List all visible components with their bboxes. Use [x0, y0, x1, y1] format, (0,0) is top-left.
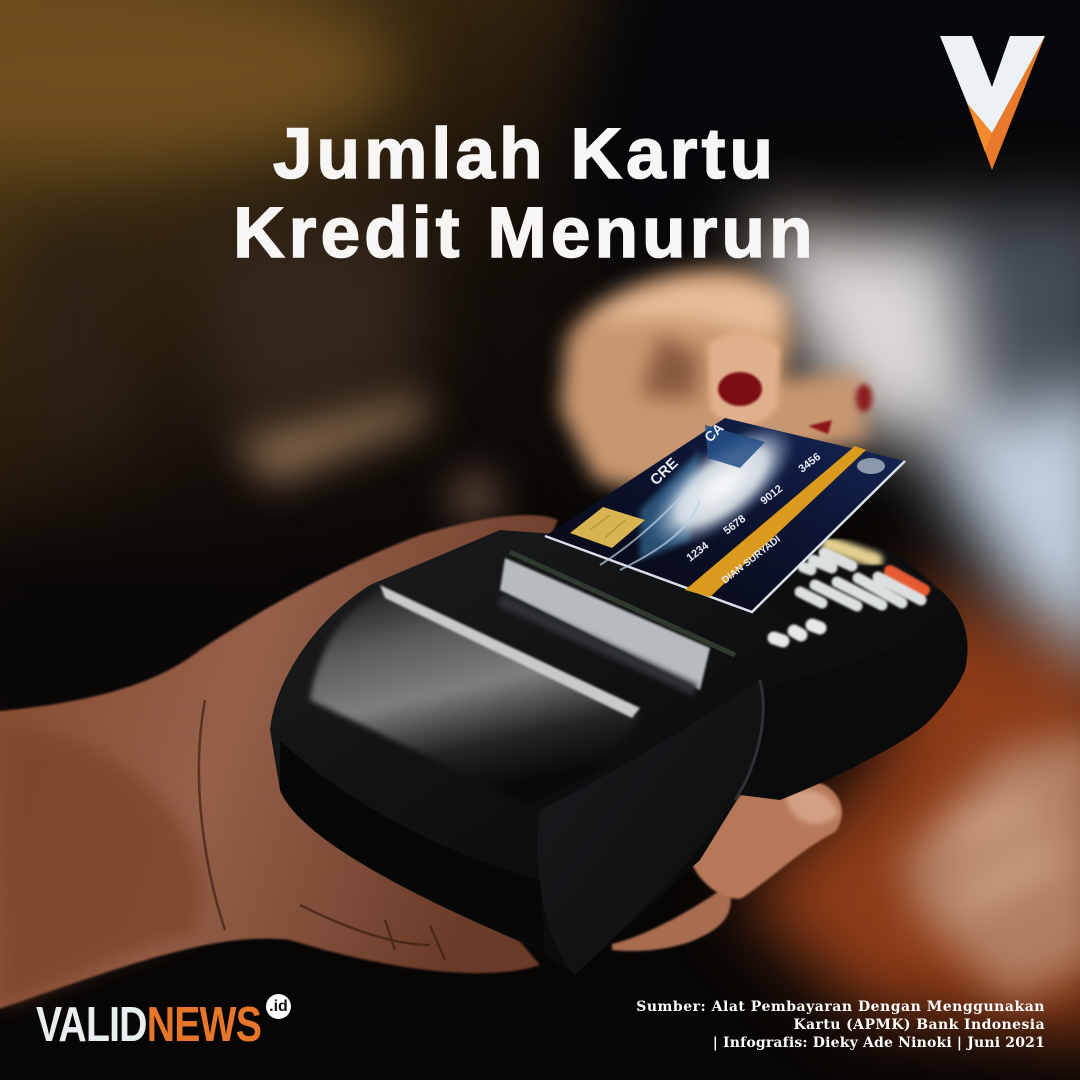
credit card: 9012 [758, 483, 785, 507]
credit card: CRE [647, 455, 682, 489]
hand holding the terminal [0, 515, 842, 1012]
source credit: Sumber: Alat Pembayaran Dengan Menggunakan [636, 999, 1045, 1015]
badge: .id: .id [269, 998, 288, 1015]
blurred hand at lower right [900, 730, 1080, 1000]
wordmark text: VALIDNEWS [36, 998, 261, 1052]
credit card: 1234 [684, 539, 712, 564]
logo: V mark top right [940, 36, 1045, 170]
source credit: | Infografis: Dieky Ade Ninoki | Juni 2021 [713, 1035, 1045, 1051]
source credit [636, 999, 1045, 1051]
card terminal body [270, 530, 968, 975]
title [233, 115, 817, 273]
title: Kredit Menurun [233, 194, 817, 273]
credit card: DIAN SURYADI [720, 534, 783, 586]
keypad [760, 540, 945, 645]
credit card: 5678 [721, 513, 748, 537]
credit card: 3456 [796, 451, 823, 475]
card gold stripe [685, 446, 866, 597]
credit card [545, 402, 905, 612]
card chip [570, 507, 645, 548]
credit card: CA [701, 420, 727, 445]
paper roll cover [310, 590, 640, 805]
printer slot [500, 558, 710, 690]
hand holding the credit card [560, 268, 872, 490]
fingers under terminal [612, 885, 731, 951]
source credit: Kartu (APMK) Bank Indonesia [793, 1017, 1045, 1033]
badge: .id [266, 994, 291, 1019]
title: Jumlah Kartu [273, 115, 777, 194]
